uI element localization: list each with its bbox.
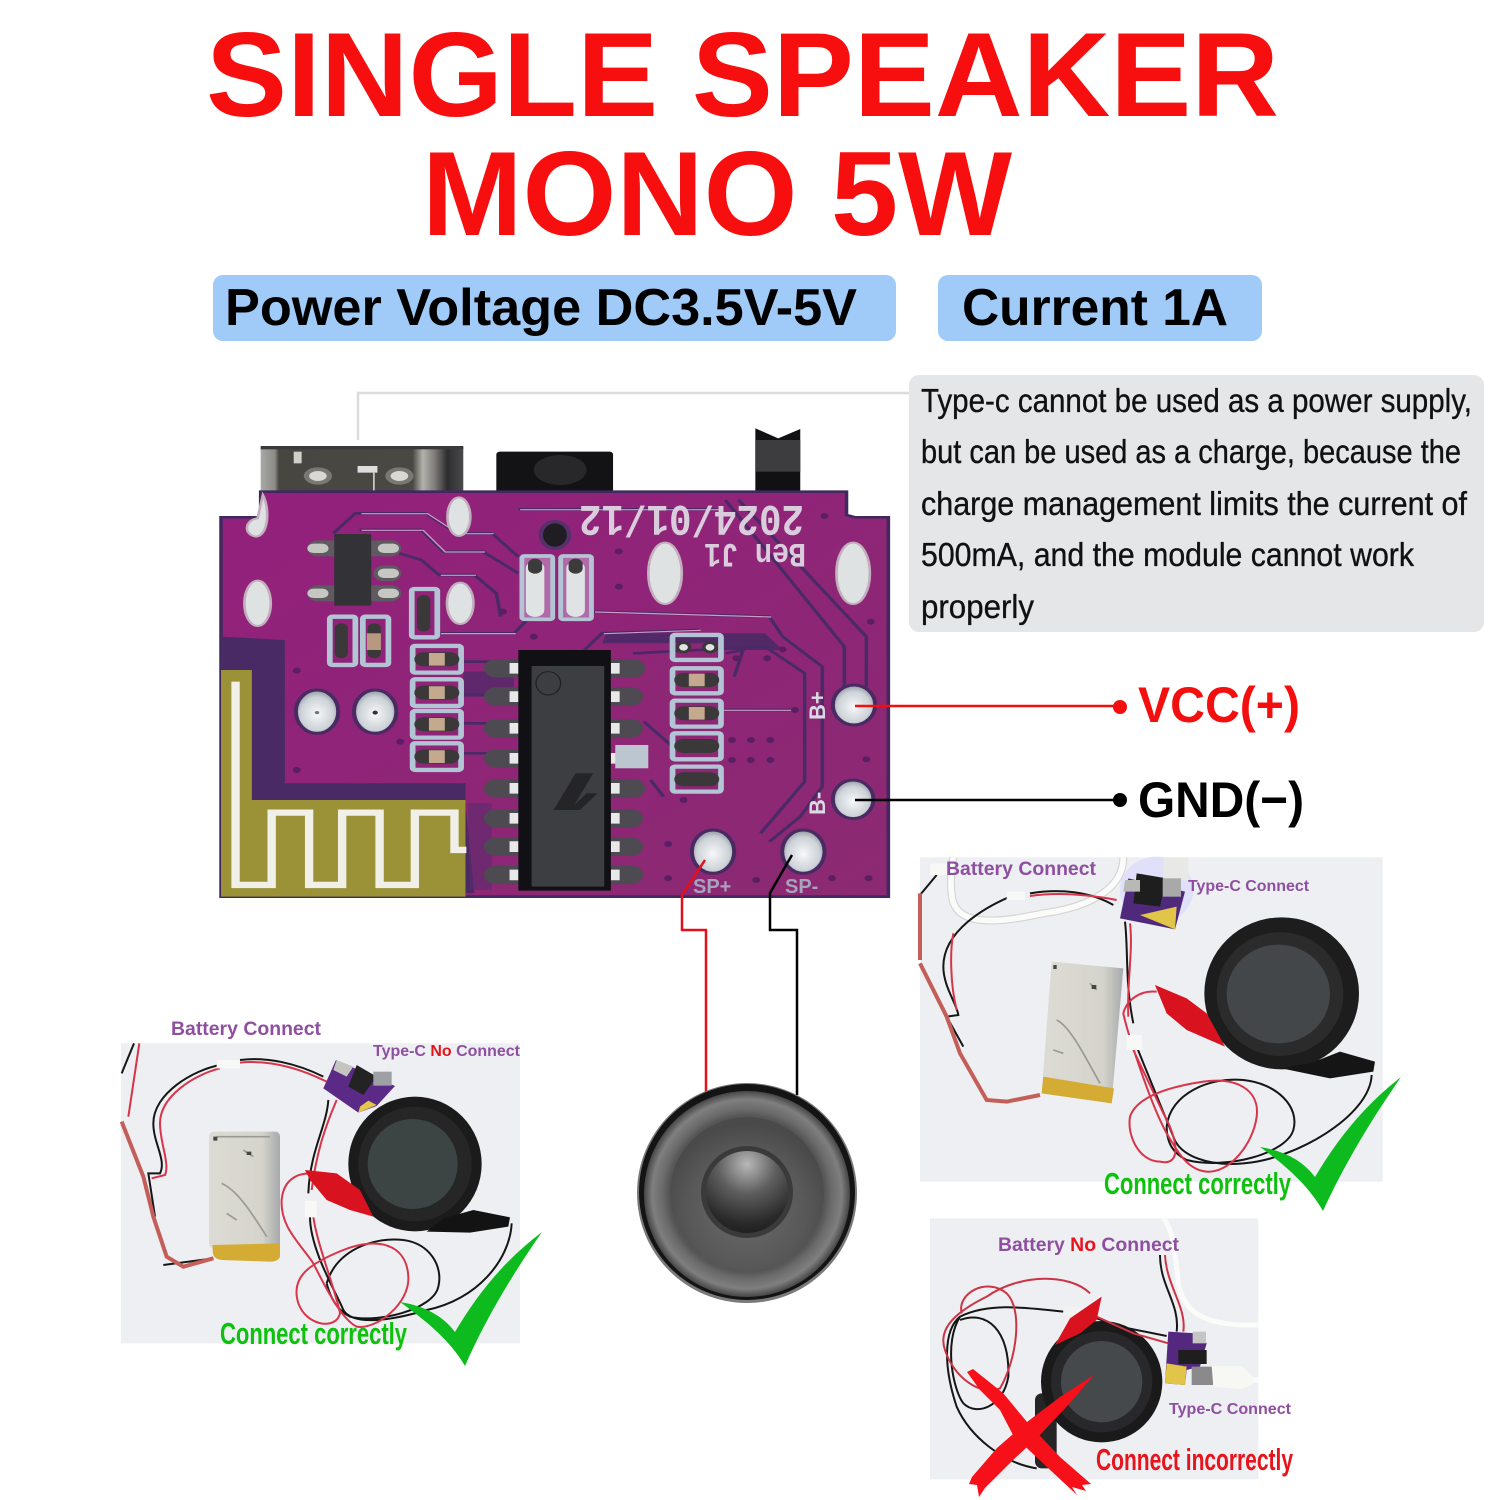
label: Type-C Connect xyxy=(1188,878,1310,895)
silkscreen pad labels: B+ xyxy=(805,691,830,720)
connector xyxy=(1063,1307,1080,1315)
silkscreen pad labels xyxy=(693,691,830,898)
via xyxy=(541,522,569,548)
board outline xyxy=(221,492,888,897)
label: Battery No Connect xyxy=(998,1235,1180,1256)
speaker xyxy=(1204,917,1359,1069)
status: incorrect: Connect incorrectly xyxy=(1096,1442,1294,1477)
main chip xyxy=(496,650,648,891)
connectors xyxy=(930,863,1142,1050)
USB-C connector xyxy=(261,446,463,493)
photo: battery connected, Type-C not connected xyxy=(121,1019,520,1343)
wires xyxy=(122,1043,512,1327)
label: Type-C No Connect xyxy=(373,1043,520,1060)
vias xyxy=(293,513,875,883)
VCC lead and label xyxy=(855,677,1300,733)
spec badge: power voltage: Power Voltage DC3.5V-5V xyxy=(225,279,857,337)
red speaker wire xyxy=(682,860,706,1092)
trace highlights xyxy=(362,510,798,710)
title: MONO 5W xyxy=(422,127,1013,261)
photo: Type-C only, incorrect xyxy=(930,1218,1292,1479)
battery xyxy=(1042,962,1123,1103)
round test pads xyxy=(296,685,875,873)
black speaker wire xyxy=(770,855,797,1095)
callout: Type-C note: 500mA, and the module cannot work xyxy=(921,536,1414,573)
ground shading xyxy=(221,637,474,893)
spec badge: current: Current 1A xyxy=(962,279,1228,337)
checkmark and status: right photo: Connect correctly xyxy=(1104,1166,1292,1201)
VCC lead and label: VCC(+) xyxy=(1138,677,1300,733)
checkmark and status: left photo xyxy=(220,1232,542,1366)
module xyxy=(323,1060,395,1113)
SMD parts small xyxy=(330,589,721,792)
callout: Type-C note: properly xyxy=(921,588,1034,625)
label: Type-C Connect xyxy=(1169,1401,1292,1418)
module xyxy=(1120,857,1188,929)
speaker illustration xyxy=(637,1083,857,1303)
title: SINGLE SPEAKER xyxy=(206,8,1279,142)
white cable xyxy=(1163,1218,1258,1325)
SMD bodies xyxy=(341,600,718,779)
mounting pads xyxy=(244,495,870,626)
antenna copper xyxy=(221,670,465,897)
checkmark and status: right photo xyxy=(1104,1077,1401,1211)
module xyxy=(1165,1332,1258,1389)
checkmark and status: left photo: Connect correctly xyxy=(220,1316,408,1351)
silkscreen pad labels: B- xyxy=(805,792,830,815)
red cross mark xyxy=(967,1369,1094,1497)
photo: battery and Type-C connected xyxy=(920,857,1383,1182)
title xyxy=(206,8,1279,261)
wires xyxy=(943,1255,1184,1468)
PCB module xyxy=(221,428,888,898)
speaker xyxy=(1035,1321,1162,1468)
label: Battery Connect xyxy=(171,1019,322,1040)
battery xyxy=(209,1132,280,1262)
LEDs xyxy=(522,556,591,619)
red clip xyxy=(1055,1297,1102,1345)
white cable xyxy=(951,857,1123,921)
GND lead and label xyxy=(855,772,1304,828)
usb glow xyxy=(1120,857,1193,923)
clips xyxy=(305,1170,373,1217)
antenna meander trace xyxy=(236,682,466,885)
audio jack xyxy=(496,452,613,493)
silkscreen pad labels: SP- xyxy=(785,876,818,898)
keepout shading xyxy=(468,803,492,890)
connectors xyxy=(217,1060,317,1217)
white cable core xyxy=(951,857,1123,921)
silkscreen name: Ben J1 xyxy=(704,533,806,571)
callout: Type-C note xyxy=(909,375,1484,632)
wires xyxy=(920,875,1372,1172)
leader line: Type-C note xyxy=(358,393,909,440)
speaker xyxy=(348,1097,482,1231)
slide switch xyxy=(755,428,800,492)
callout: Type-C note: charge management limits the current of xyxy=(921,485,1468,522)
SOT regulator xyxy=(314,534,393,606)
label: Battery Connect xyxy=(946,859,1097,880)
circuit traces xyxy=(333,500,866,842)
silkscreen pad labels: SP+ xyxy=(693,876,731,898)
silkscreen date: 2024/01/12 xyxy=(579,492,804,542)
clips xyxy=(1155,985,1225,1047)
GND lead and label: GND(−) xyxy=(1138,772,1304,828)
